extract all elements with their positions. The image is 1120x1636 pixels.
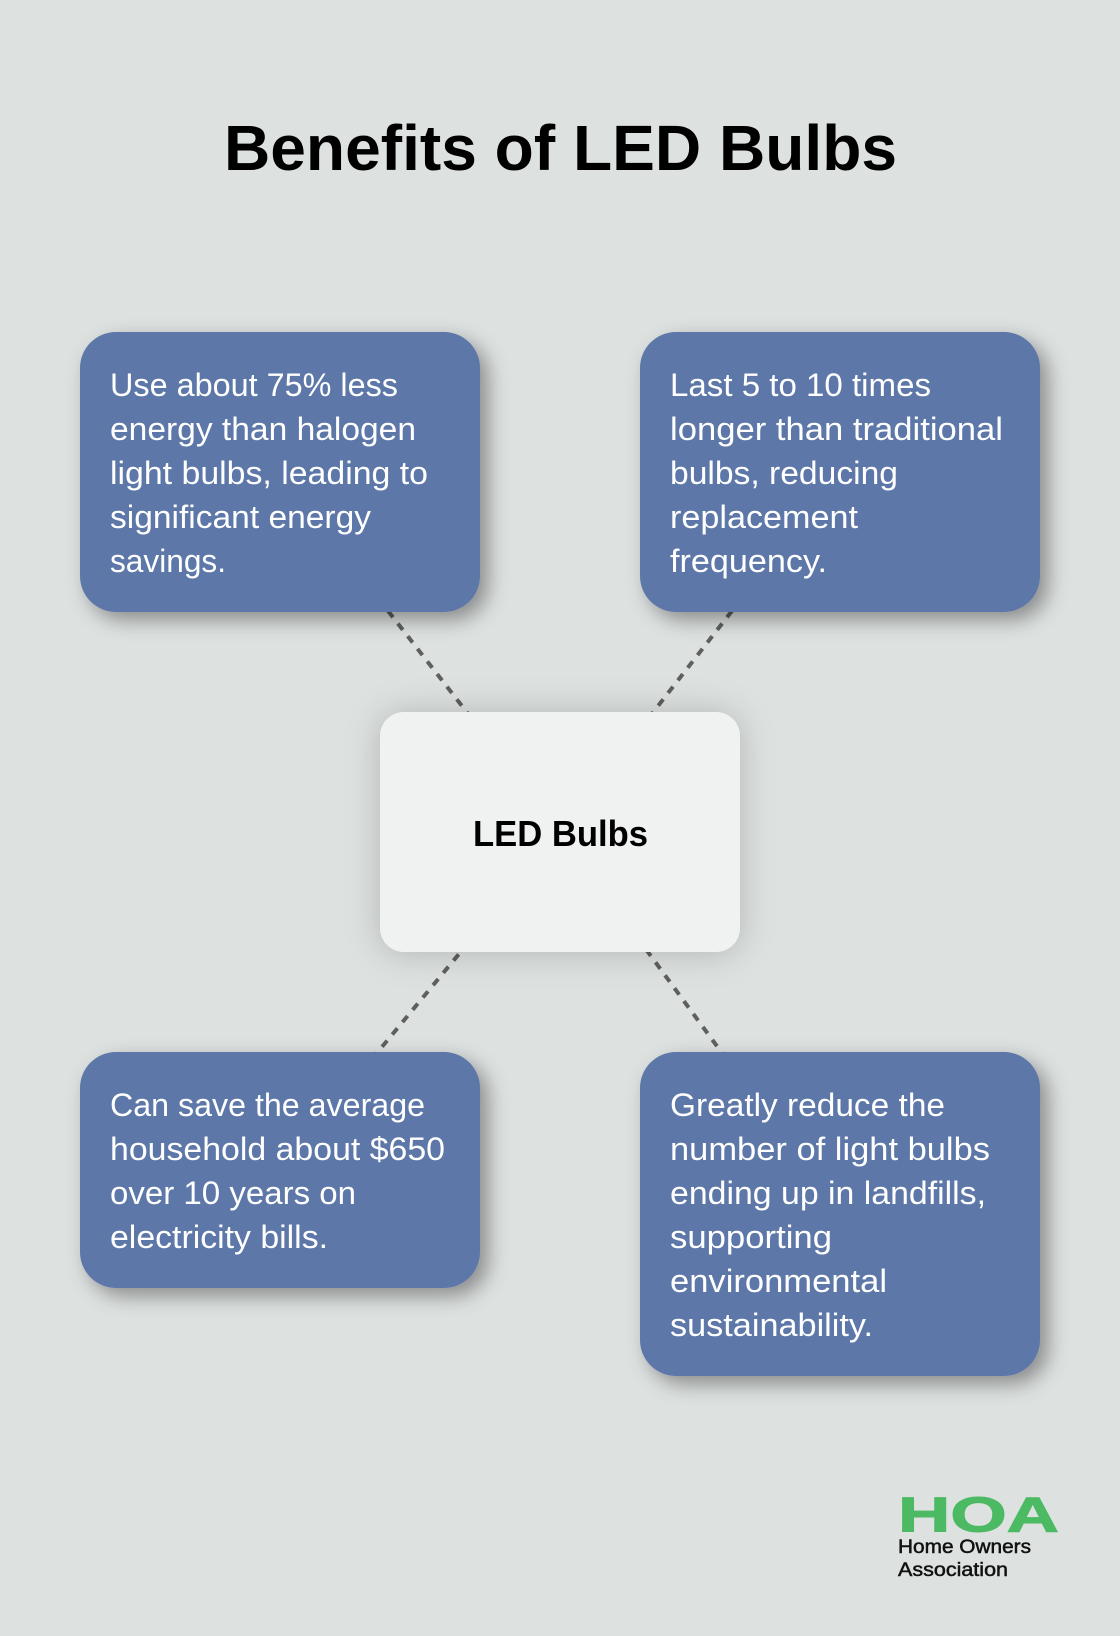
logo: HOA Home Owners Association [898, 1488, 1059, 1581]
text: landfill reduction benefit [670, 1087, 990, 1343]
text: lifespan benefit: frequency. [670, 543, 827, 579]
panel: landfill reduction [640, 1052, 1040, 1376]
text: landfill reduction benefit: supporting [670, 1219, 832, 1255]
centre label: LED Bulbs [473, 813, 648, 854]
connector: top-right card to centre [560, 472, 840, 832]
text: household savings benefit: electricity bills. [110, 1219, 328, 1255]
text: landfill reduction benefit: ending up in landfills, [670, 1175, 986, 1211]
logo: HOA Home Owners Association: Home Owners [898, 1537, 1031, 1558]
title: Benefits of LED Bulbs [224, 112, 897, 184]
panel: centre node [380, 712, 740, 952]
text: lifespan benefit: replacement [670, 499, 858, 535]
text: energy use benefit: energy than halogen [110, 411, 416, 447]
text: energy use benefit: significant energy [110, 499, 371, 535]
text: lifespan benefit: bulbs, reducing [670, 455, 898, 491]
text: energy use benefit: savings. [110, 543, 226, 579]
text: lifespan benefit: Last 5 to 10 times [670, 367, 931, 403]
text: household savings benefit: household about $650 [110, 1131, 445, 1167]
text: lifespan benefit [670, 367, 1003, 579]
text: landfill reduction benefit: sustainability. [670, 1307, 873, 1343]
text: household savings benefit: over 10 years on [110, 1175, 356, 1211]
text: energy use benefit: light bulbs, leading to [110, 455, 428, 491]
text: landfill reduction benefit: number of light bulbs [670, 1131, 990, 1167]
logo: HOA Home Owners Association: Association [898, 1560, 1008, 1581]
text: household savings benefit [110, 1087, 445, 1255]
text: lifespan benefit: longer than traditional [670, 411, 1003, 447]
connector: bottom-right card to centre [560, 832, 840, 1214]
panel: energy use [80, 332, 480, 612]
panel: household savings [80, 1052, 480, 1288]
text: household savings benefit: Can save the average [110, 1087, 425, 1123]
connector: bottom-left card to centre [280, 832, 560, 1170]
text: landfill reduction benefit: environmental [670, 1263, 887, 1299]
text: energy use benefit: Use about 75% less [110, 367, 398, 403]
connector: top-left card to centre [280, 472, 560, 832]
text: landfill reduction benefit: Greatly reduce the [670, 1087, 945, 1123]
logo: HOA Home Owners Association: HOA [898, 1488, 1059, 1542]
panel: lifespan [640, 332, 1040, 612]
text: energy use benefit [110, 367, 428, 579]
